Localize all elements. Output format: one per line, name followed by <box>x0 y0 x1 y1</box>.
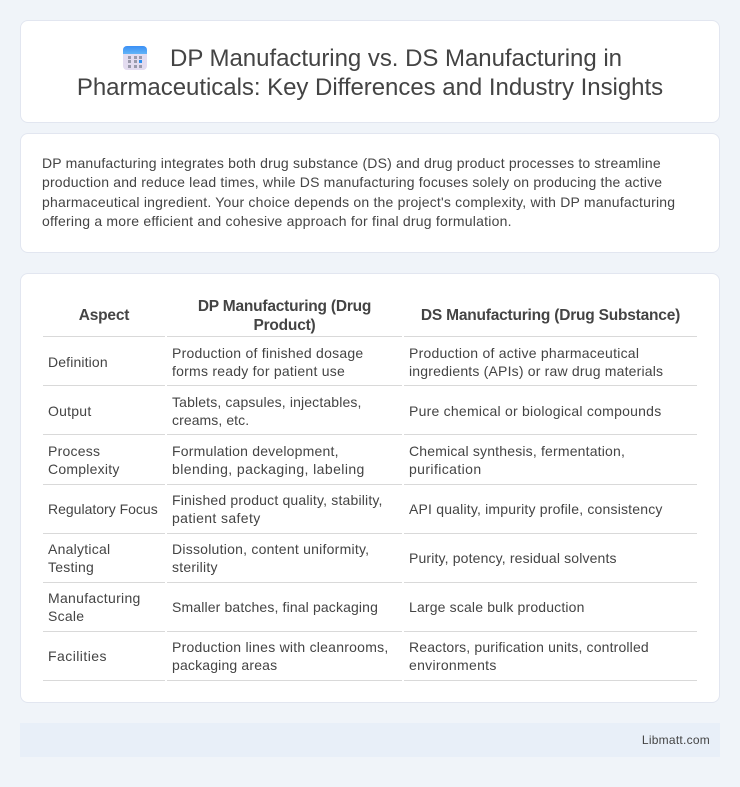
row: process complexity: Chemical synthesis, fermentation, <box>409 443 625 459</box>
row: analytical testing <box>43 541 697 583</box>
row: facilities: Production lines with cleanrooms, <box>172 639 388 655</box>
row: definition <box>43 345 697 386</box>
row: process complexity: Formulation development, <box>172 443 339 459</box>
row: output <box>43 394 697 435</box>
summary card <box>20 133 720 253</box>
summary text: offering a more efficient and cohesive approach for final drug formulation. <box>42 213 512 229</box>
row: regulatory focus: Finished product quality, stability, <box>172 492 383 508</box>
row: output: Pure chemical or biological compounds <box>409 403 661 419</box>
row: facilities: environments <box>409 657 497 673</box>
row: regulatory focus <box>43 492 697 534</box>
row: facilities: Facilities <box>48 648 107 664</box>
row: regulatory focus: Regulatory Focus <box>48 501 158 517</box>
row: analytical testing: Purity, potency, residual solvents <box>409 550 617 566</box>
row: regulatory focus: patient safety <box>172 510 261 526</box>
row: manufacturing scale: Smaller batches, final packaging <box>172 599 378 615</box>
summary text: pharmaceutical ingredient. Your choice depends on the project's complexity, with DP manufacturing <box>42 194 675 210</box>
row: definition: Definition <box>48 354 108 370</box>
row: manufacturing scale <box>43 590 697 632</box>
table header: Product) <box>253 317 316 334</box>
row: facilities: packaging areas <box>172 657 277 673</box>
row: output: creams, etc. <box>172 412 249 428</box>
title: DP Manufacturing vs. DS Manufacturing in <box>170 45 622 72</box>
row: manufacturing scale: Large scale bulk production <box>409 599 585 615</box>
row: process complexity: blending, packaging, labeling <box>172 461 365 477</box>
table header <box>43 298 697 337</box>
row: facilities <box>43 639 697 681</box>
comparison table <box>43 298 697 681</box>
footer bar <box>20 723 720 757</box>
row: analytical testing: sterility <box>172 559 218 575</box>
row: analytical testing: Analytical <box>48 541 110 557</box>
row: process complexity: Complexity <box>48 461 120 477</box>
icon: calendar grid <box>123 46 147 70</box>
table card <box>20 273 720 703</box>
row: output: Tablets, capsules, injectables, <box>172 394 362 410</box>
row: output: Output <box>48 403 91 419</box>
row: facilities: Reactors, purification units, controlled <box>409 639 649 655</box>
summary text: DP manufacturing integrates both drug substance (DS) and drug product processes to streamline <box>42 155 661 171</box>
row: analytical testing: Testing <box>48 559 94 575</box>
row: process complexity: Process <box>48 443 100 459</box>
title: Pharmaceuticals: Key Differences and Industry Insights <box>77 74 663 101</box>
footer text: Libmatt.com <box>642 733 710 747</box>
row: definition: ingredients (APIs) or raw drug materials <box>409 363 663 379</box>
row: manufacturing scale: Scale <box>48 608 84 624</box>
table header: DP Manufacturing (Drug <box>198 298 371 315</box>
row: definition: Production of finished dosage <box>172 345 363 361</box>
row: definition: forms ready for patient use <box>172 363 345 379</box>
row: process complexity: purification <box>409 461 482 477</box>
summary text <box>42 155 675 229</box>
summary text: production and reduce lead times, while DS manufacturing focuses solely on producing the active <box>42 174 662 190</box>
title card <box>20 20 720 123</box>
table header: DS Manufacturing (Drug Substance) <box>421 307 680 324</box>
table header: Aspect <box>79 307 129 324</box>
row: analytical testing: Dissolution, content uniformity, <box>172 541 369 557</box>
row: definition: Production of active pharmaceutical <box>409 345 639 361</box>
row: process complexity <box>43 443 697 485</box>
row: manufacturing scale: Manufacturing <box>48 590 141 606</box>
row: regulatory focus: API quality, impurity profile, consistency <box>409 501 663 517</box>
title <box>77 45 663 101</box>
